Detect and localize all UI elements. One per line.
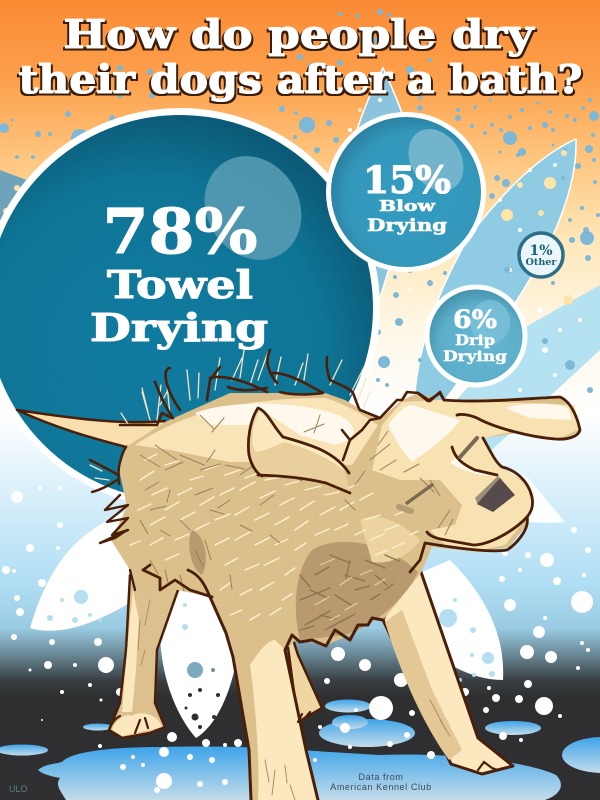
label: 78% towel drying [90, 195, 268, 350]
highlight on medium circle [397, 119, 475, 201]
rear leg light [112, 590, 162, 736]
muzzle highlights [450, 404, 572, 476]
eyes closed [399, 438, 477, 511]
dog [17, 350, 580, 800]
neck ruff line [342, 392, 444, 460]
highlight on big circle [185, 138, 321, 278]
title shadow [16, 14, 584, 105]
artist mark: ULO [9, 784, 28, 794]
droplets on white petals [47, 590, 495, 682]
big circle: towel drying 78% [0, 112, 376, 504]
title: their dogs after a bath? [18, 57, 582, 103]
title shadow: their dogs after a bath? [20, 59, 584, 105]
data source credit: Data from [359, 772, 403, 782]
label: 6% drip drying [443, 305, 507, 365]
upper fur spikes pale [90, 350, 370, 480]
chest pale strokes [315, 559, 385, 620]
label: 78% towel drying: Towel [107, 262, 253, 307]
label: 78% towel drying: 78% [102, 195, 258, 268]
chest fur strokes [300, 555, 399, 630]
near foreleg light [250, 640, 318, 800]
forehead highlight [388, 405, 460, 462]
label: 15% blow drying: Blow [379, 197, 436, 215]
highlight on small circle [470, 300, 510, 344]
label: 15% blow drying: Drying [367, 216, 447, 236]
tiny circle: other 1% [519, 233, 563, 277]
right ear outline [418, 393, 580, 439]
head base [372, 400, 578, 550]
foreleg shade [385, 610, 462, 760]
leg fur hairs [138, 600, 450, 800]
far middle leg [287, 630, 322, 722]
body silhouette [111, 393, 580, 800]
small circle: drip drying 6% [427, 287, 525, 385]
dark flank fur [189, 530, 206, 575]
right foreleg [383, 572, 513, 774]
medium circle: blow drying 15% [328, 114, 484, 270]
upper fur spikes dark [120, 350, 380, 425]
light bubbles on petals [348, 78, 582, 392]
tail [17, 410, 170, 447]
armpit fur [143, 565, 212, 597]
dark fur strokes [140, 415, 453, 591]
label: 15% blow drying [363, 158, 451, 236]
title shadow: How do people dry [66, 14, 537, 60]
white droplets lower area [2, 486, 593, 793]
title shadow: their dogs after a bath? [16, 59, 580, 105]
bubbles on petals [3, 108, 573, 305]
nose [475, 476, 515, 512]
belly fur outline [210, 597, 383, 800]
bubbles on orange sky [0, 9, 600, 261]
label: 1% other: Other [526, 257, 558, 268]
data source credit: American Kennel Club [330, 782, 432, 792]
label: 15% blow drying: 15% [363, 158, 451, 202]
left ear [248, 408, 350, 493]
label: 78% towel drying: Drying [90, 305, 268, 350]
label: 6% drip drying: Drying [443, 349, 507, 365]
back highlight [135, 398, 378, 465]
bubbles near dog back [375, 267, 593, 393]
label: 6% drip drying: 6% [453, 305, 497, 334]
rear leg [109, 560, 190, 738]
label: 1% other: 1% [530, 243, 552, 259]
saddle highlight [195, 404, 354, 445]
title [16, 12, 584, 105]
label: 1% other [526, 243, 558, 268]
light fur strokes [130, 454, 418, 620]
dark drops on lower white petal [184, 662, 220, 729]
muzzle outline [410, 438, 533, 572]
title shadow: How do people dry [62, 14, 533, 60]
rump outline [90, 447, 135, 590]
cheek fur [360, 517, 420, 563]
dark chest fur [296, 542, 418, 640]
paw details [109, 712, 498, 770]
label: 6% drip drying: Drip [455, 333, 495, 349]
title: How do people dry [64, 12, 535, 58]
water puddles [0, 700, 600, 800]
